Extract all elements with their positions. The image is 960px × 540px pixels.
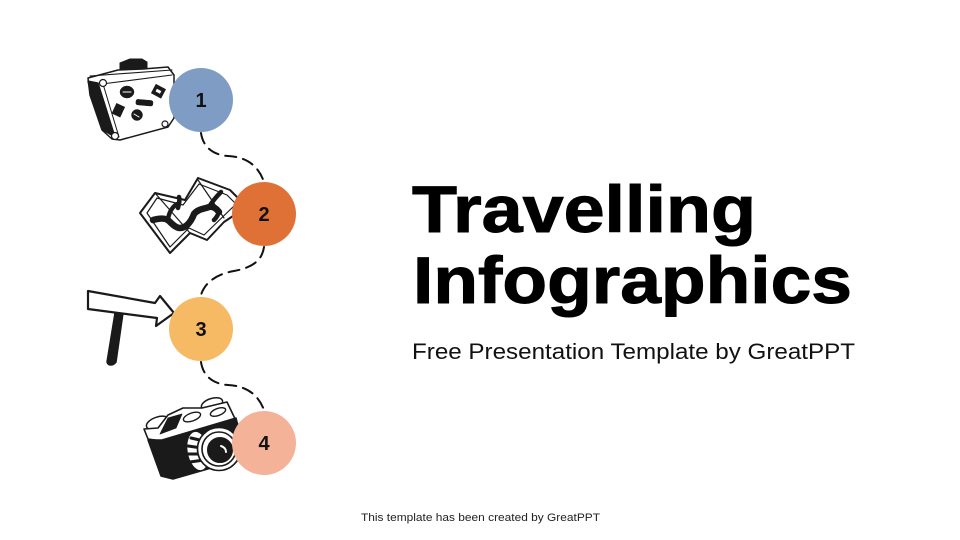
icon: folded map [140, 178, 240, 253]
title [412, 172, 852, 317]
step 2 circle: 2 [258, 204, 270, 226]
subtitle: Free Presentation Template by GreatPPT [412, 339, 855, 364]
step 1 circle [169, 68, 233, 132]
step 4 circle: 4 [258, 433, 270, 455]
icon: suitcase [88, 59, 174, 140]
step 3 circle [169, 297, 233, 361]
dashed route 2 to 3 [201, 247, 264, 295]
step 3 circle: 3 [195, 319, 207, 341]
footer note: This template has been created by GreatPPT [361, 512, 600, 524]
icon: camera [144, 395, 246, 479]
dashed route 3 to 4 [201, 362, 264, 410]
dashed route 1 to 2 [201, 133, 264, 182]
step 2 circle [232, 182, 296, 246]
step 1 circle: 1 [195, 90, 207, 112]
step 4 circle [232, 411, 296, 475]
title: Infographics [413, 243, 852, 317]
icon: signpost arrow [88, 291, 174, 365]
title: Travelling [412, 172, 756, 246]
